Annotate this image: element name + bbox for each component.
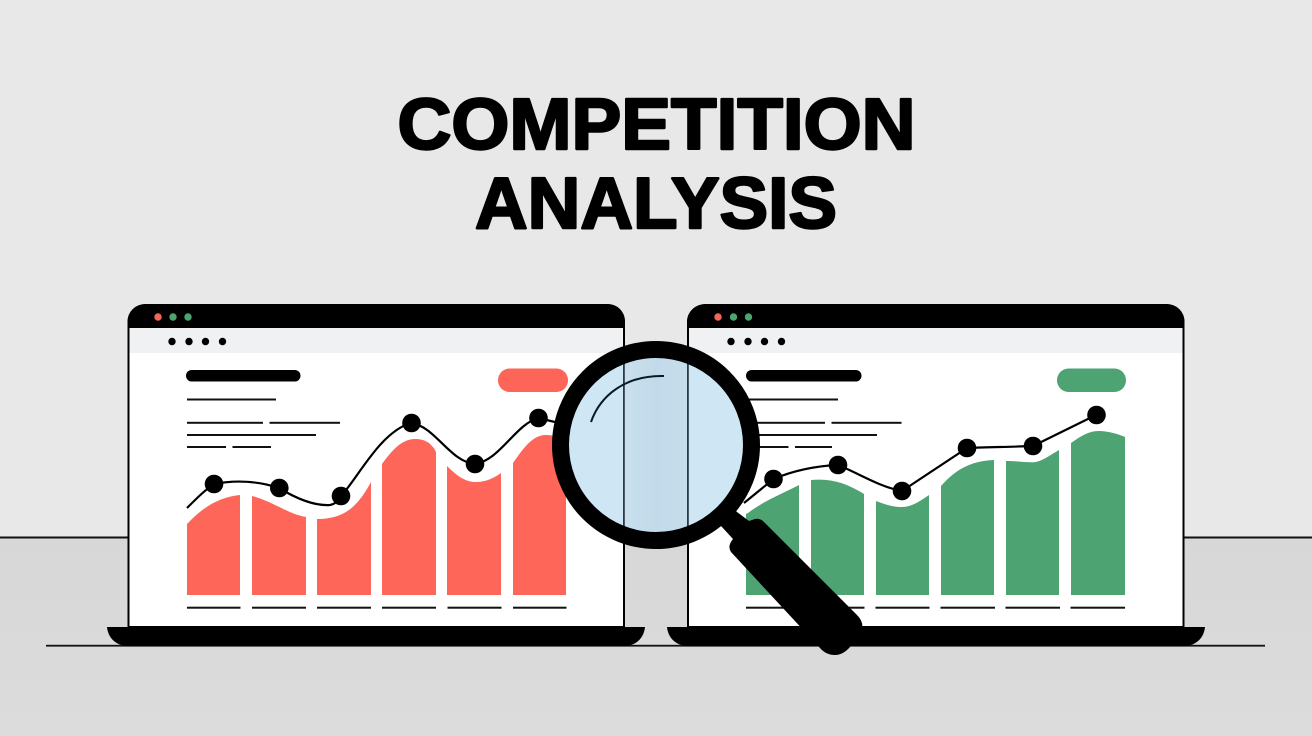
screen frame bbox=[688, 305, 1184, 627]
green bars bbox=[746, 431, 1125, 595]
title: ANALYSIS bbox=[475, 164, 837, 244]
axis labels bbox=[746, 607, 1125, 609]
green badge bbox=[1057, 368, 1126, 392]
toolbar dots bbox=[727, 338, 785, 345]
heading bar bbox=[746, 370, 862, 382]
lens bbox=[568, 357, 744, 533]
text lines bbox=[187, 398, 340, 448]
table line bbox=[46, 645, 1265, 647]
background floor bbox=[0, 537, 1312, 736]
red badge bbox=[498, 368, 568, 392]
browser title bar bbox=[687, 304, 1184, 328]
laptop base bbox=[667, 627, 1205, 646]
lens magnified band bbox=[623, 350, 689, 540]
lens glare bbox=[591, 376, 664, 422]
trend line bbox=[744, 415, 1096, 503]
heading bar bbox=[186, 370, 300, 382]
magnifying glass bbox=[560, 350, 862, 655]
browser title bar bbox=[128, 304, 625, 328]
horizon line right bbox=[1184, 536, 1312, 538]
horizon line left bbox=[0, 536, 128, 538]
red bars bbox=[187, 435, 566, 595]
toolbar bbox=[130, 328, 622, 353]
laptop base bbox=[107, 627, 645, 646]
toolbar dots bbox=[168, 338, 226, 345]
laptop: right (green competitor) bbox=[667, 304, 1205, 646]
window control dots bbox=[714, 313, 752, 321]
screen frame bbox=[128, 305, 624, 627]
title bbox=[398, 85, 916, 244]
lens rim bbox=[560, 350, 752, 540]
data points bbox=[764, 406, 1106, 500]
laptop: left (red competitor) bbox=[107, 304, 645, 646]
title: COMPETITION bbox=[398, 85, 916, 165]
data points bbox=[205, 409, 548, 505]
axis labels bbox=[187, 607, 566, 609]
toolbar bbox=[689, 328, 1182, 353]
window control dots bbox=[154, 313, 192, 321]
background wall bbox=[0, 0, 1312, 537]
handle bbox=[708, 503, 862, 655]
text lines bbox=[746, 398, 902, 448]
trend line bbox=[187, 418, 555, 508]
